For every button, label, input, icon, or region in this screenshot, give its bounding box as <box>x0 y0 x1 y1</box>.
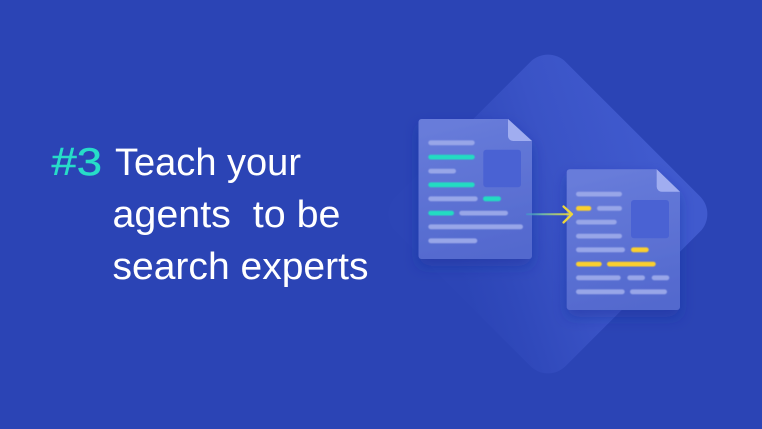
heading <box>52 141 368 288</box>
arrow head <box>564 206 572 222</box>
background rounded diamond <box>378 44 718 384</box>
image placeholder <box>631 200 669 238</box>
arrow between documents <box>527 206 572 222</box>
page body <box>567 169 680 310</box>
image placeholder <box>483 150 521 187</box>
page fold <box>508 119 532 141</box>
text lines <box>428 140 523 243</box>
page fold <box>657 169 680 192</box>
text lines <box>576 192 669 294</box>
heading line 1: Teach your <box>115 142 301 184</box>
number label: #3 <box>52 141 102 184</box>
document: result with yellow highlights <box>567 169 680 310</box>
teal highlighted lines <box>428 155 501 216</box>
document: source with teal highlights <box>418 119 532 259</box>
heading line 3: search experts <box>112 246 368 288</box>
yellow highlighted lines <box>576 206 656 266</box>
arrow shaft <box>527 213 571 215</box>
page body <box>418 119 532 259</box>
heading line 2: agents to be <box>112 194 340 236</box>
